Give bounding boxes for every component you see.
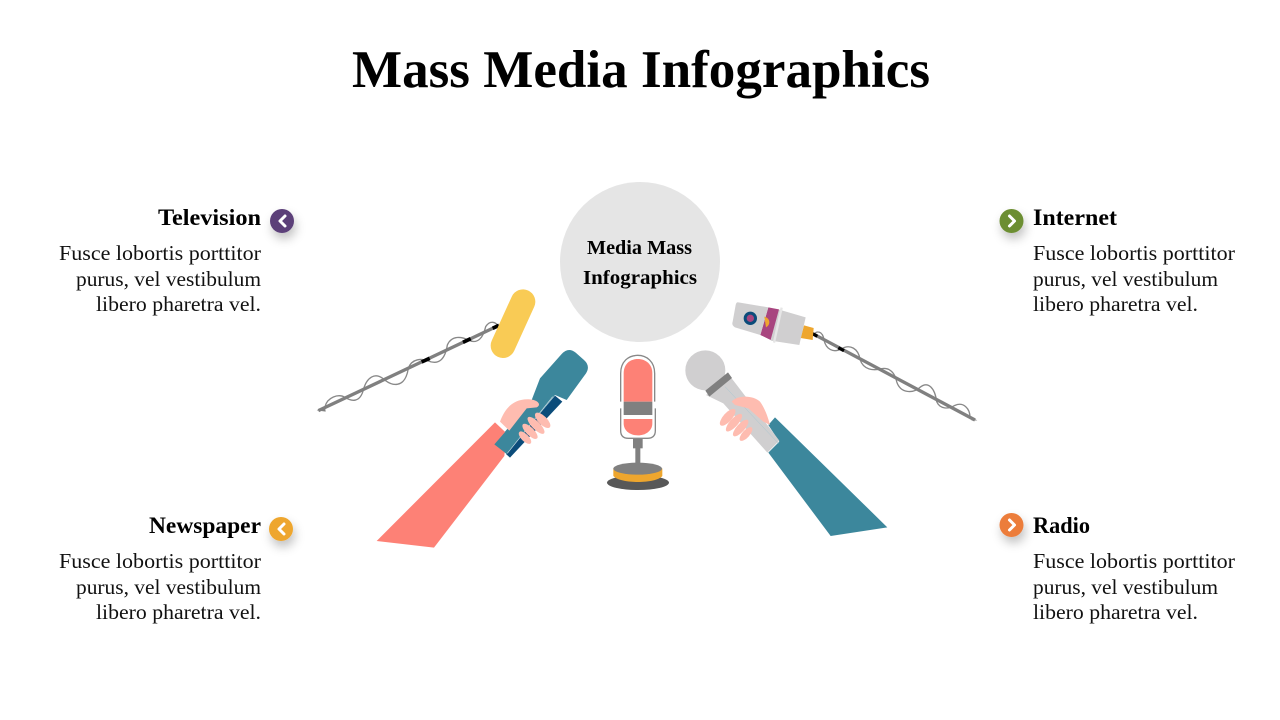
heading: radio: Radio xyxy=(1033,513,1090,538)
text: newspaper description: Fusce lobortis porttitor xyxy=(59,549,261,573)
icon: newspaper chevron badge xyxy=(269,517,293,541)
text: internet description: libero pharetra vel. xyxy=(1033,292,1198,316)
center circle: Infographics xyxy=(583,267,697,289)
text: internet description: Fusce lobortis porttitor xyxy=(1033,241,1235,265)
text: television description: libero pharetra vel. xyxy=(96,292,261,316)
center circle xyxy=(560,182,720,342)
center circle: Media Mass xyxy=(587,237,692,259)
illustration: handheld microphone left with pink sleeve xyxy=(377,350,588,548)
illustration: handheld microphone right with teal sleeve xyxy=(685,350,887,536)
text: radio description: Fusce lobortis porttitor xyxy=(1033,549,1235,573)
text: internet description xyxy=(1033,241,1235,316)
icon: television chevron badge xyxy=(270,209,294,233)
text: television description: Fusce lobortis porttitor xyxy=(59,241,261,265)
heading: television: Television xyxy=(158,205,261,230)
text: radio description: purus, vel vestibulum xyxy=(1033,575,1218,599)
panel: internet xyxy=(1000,205,1235,316)
illustration: central studio microphone xyxy=(607,355,669,490)
panel: radio xyxy=(1000,513,1235,624)
icon: radio chevron badge xyxy=(1000,513,1024,537)
text: internet description: purus, vel vestibulum xyxy=(1033,267,1218,291)
heading: internet: Internet xyxy=(1033,205,1117,230)
panel: newspaper xyxy=(59,513,293,624)
text: television description: purus, vel vestibulum xyxy=(76,267,261,291)
illustration: boom microphone right xyxy=(732,302,977,421)
illustration: boom microphone left xyxy=(317,302,523,412)
text: newspaper description xyxy=(59,549,261,624)
text: newspaper description: purus, vel vestibulum xyxy=(76,575,261,599)
icon: internet chevron badge xyxy=(1000,209,1024,233)
title: Mass Media Infographics xyxy=(352,41,930,99)
text: radio description xyxy=(1033,549,1235,624)
text: radio description: libero pharetra vel. xyxy=(1033,600,1198,624)
panel: television xyxy=(59,205,294,316)
heading: newspaper: Newspaper xyxy=(149,513,261,538)
text: newspaper description: libero pharetra vel. xyxy=(96,600,261,624)
text: television description xyxy=(59,241,261,316)
